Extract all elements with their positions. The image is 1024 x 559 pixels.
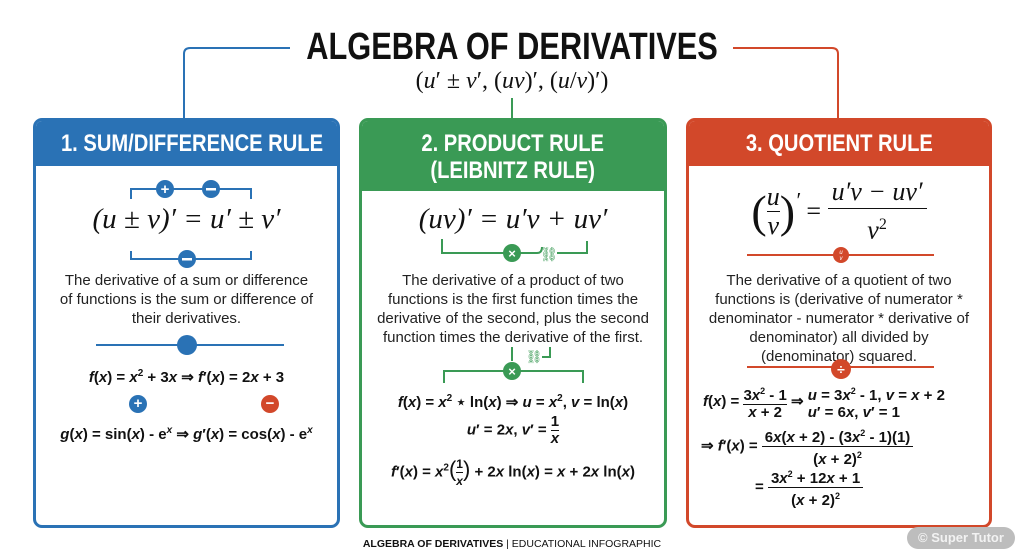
formula: quotient rule xyxy=(751,177,927,245)
description: functions is (derivative of numerator * xyxy=(715,291,963,308)
description: denominator) all divided by xyxy=(749,329,929,346)
example: derivative: ⇒ f′(x) = xyxy=(701,437,758,454)
example: derivative xyxy=(701,428,913,468)
example: definition: f(x) = ⇒ xyxy=(703,393,804,410)
example 2: g(x) = sin(x) - ex ⇒ g′(x) = cos(x) - ex xyxy=(60,425,313,443)
example: derivative: (x + 2)2 xyxy=(813,450,862,468)
panel: product rule: x xyxy=(456,474,463,488)
example: definition: x + 2 xyxy=(748,404,782,421)
divider with dot xyxy=(96,335,284,355)
connector lines xyxy=(183,47,839,118)
example: simplified: (x + 2)2 xyxy=(791,491,840,509)
description xyxy=(377,272,649,346)
description: (denominator) squared. xyxy=(761,348,917,365)
header: product: 2. PRODUCT RULE xyxy=(422,130,604,157)
bracket diagram xyxy=(130,180,252,268)
bracket diagram: ⛓ xyxy=(540,246,558,262)
example: derivative: 6x(x + 2) - (3x2 - 1)(1) xyxy=(765,428,910,446)
header: product xyxy=(362,121,664,191)
panel: product rule: x xyxy=(551,430,559,447)
bracket diagram: + xyxy=(161,181,170,198)
header: sum/difference: 1. SUM/DIFFERENCE RULE xyxy=(61,130,323,157)
example: simplified: = xyxy=(755,478,764,495)
description: denominator - numerator * derivative of xyxy=(709,310,969,327)
header: quotient: 3. QUOTIENT RULE xyxy=(745,130,933,157)
divider with divide dot: ÷ xyxy=(837,361,845,377)
description: The derivative of a product of two xyxy=(402,272,624,289)
subtitle formula: (u′ ± v′, (uv)′, (u/v)′) xyxy=(416,68,608,94)
description xyxy=(709,272,970,365)
divider with u/v dot xyxy=(747,247,934,263)
header: quotient xyxy=(689,121,989,166)
panel: product rule: f′(x) = x2( ) + 2x ln(x) = x + 2x ln(x) xyxy=(391,456,635,481)
formula: quotient rule: v xyxy=(767,211,779,240)
panel: sum/difference rule xyxy=(33,118,340,528)
example: simplified xyxy=(755,469,863,509)
description: functions is the first function times the xyxy=(388,291,638,308)
formula: quotient rule: ( )′ = xyxy=(751,186,821,237)
formula: quotient rule: u′v − uv′ xyxy=(832,177,923,206)
formula: quotient rule: u xyxy=(767,182,780,211)
icon: plus: + xyxy=(134,395,142,412)
connector diagram xyxy=(443,347,584,383)
panel: product rule: 1 xyxy=(551,413,559,430)
divider with u/v dot: v xyxy=(840,256,844,262)
connector diagram: ⛓ xyxy=(526,349,542,364)
description: of functions is the sum or difference of xyxy=(60,291,313,308)
example: definition: 3x2 - 1 xyxy=(743,386,787,404)
header: sum/difference xyxy=(36,121,337,166)
description: The derivative of a quotient of two xyxy=(726,272,952,289)
example: definition: u = 3x2 - 1, v = x + 2 xyxy=(808,386,945,404)
footer: ALGEBRA OF DERIVATIVES | EDUCATIONAL INFOGRAPHIC xyxy=(363,538,661,550)
divider with u/v dot: u xyxy=(839,250,843,256)
example 1: f(x) = x2 + 3x ⇒ f′(x) = 2x + 3 xyxy=(89,368,284,386)
watermark: © Super Tutor xyxy=(918,530,1004,545)
panel: quotient rule xyxy=(686,118,992,528)
description: derivative of the second, plus the second xyxy=(377,310,649,327)
header: product: (LEIBNITZ RULE) xyxy=(431,157,595,184)
formula: quotient rule: v2 xyxy=(867,216,887,245)
connector diagram: × xyxy=(508,364,516,379)
description: their derivatives. xyxy=(132,310,241,327)
icon: plus xyxy=(129,395,147,413)
panel: product rule: 1 xyxy=(456,457,463,471)
watermark xyxy=(907,527,1015,549)
description xyxy=(60,272,314,327)
example: definition xyxy=(703,386,945,421)
example: simplified: 3x2 + 12x + 1 xyxy=(771,469,860,487)
icon: minus xyxy=(261,395,279,413)
bracket diagram xyxy=(441,239,588,262)
bracket diagram: × xyxy=(508,246,516,261)
description: function times the derivative of the first. xyxy=(383,329,643,346)
panel: product rule: u′ = 2x, v′ = xyxy=(467,421,547,438)
title: ALGEBRA OF DERIVATIVES xyxy=(306,26,718,68)
formula: sum rule: (u ± v)′ = u′ ± v′ xyxy=(92,203,280,235)
icon: minus: − xyxy=(266,395,274,412)
divider with divide dot xyxy=(747,359,934,379)
example lines: f(x) = x2 ⋆ ln(x) ⇒ u = x2, v = ln(x) xyxy=(398,393,628,411)
example: definition: u′ = 6x, v′ = 1 xyxy=(808,404,900,421)
description: The derivative of a sum or difference xyxy=(65,272,308,289)
formula: product rule: (uv)′ = u′v + uv′ xyxy=(419,203,607,235)
panel: product rule xyxy=(359,118,667,528)
